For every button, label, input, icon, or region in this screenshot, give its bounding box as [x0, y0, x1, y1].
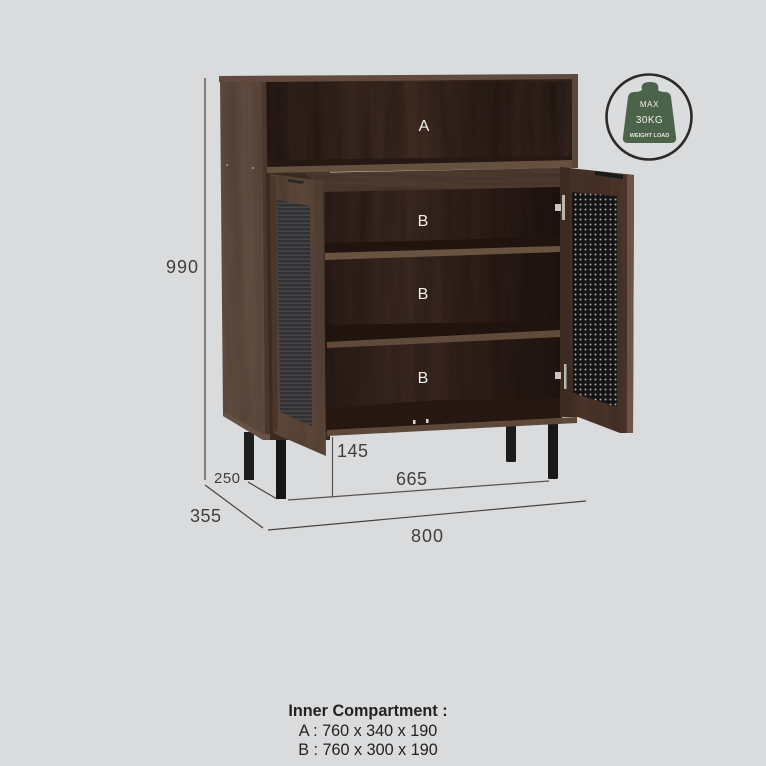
shelf 1: [325, 237, 560, 260]
interior compartments B: [325, 187, 561, 432]
compartment label B top: B: [418, 213, 428, 230]
lower hinge: [555, 364, 566, 389]
note line B: B : 760 x 300 x 190: [298, 741, 438, 759]
dimension 990: 990: [166, 257, 198, 277]
badge text: WEIGHT LOAD: WEIGHT LOAD: [630, 133, 669, 139]
left door: [270, 174, 327, 457]
cabinet floor front edge: [327, 417, 577, 436]
upper hinge: [555, 195, 565, 220]
dimension lines: [205, 78, 586, 530]
dimension 355: 355: [190, 506, 221, 526]
shelf 2: [326, 321, 560, 348]
right door mesh panel: [572, 192, 617, 407]
door header rail: [305, 168, 561, 193]
right door top bracket: [595, 171, 623, 179]
dimension 145: 145: [337, 441, 368, 461]
compartment label A: A: [419, 118, 430, 135]
dimension 665: 665: [396, 469, 427, 489]
left door mesh panel: [277, 200, 312, 426]
dimension 250: 250: [214, 470, 240, 487]
cabinet floor: [327, 398, 562, 430]
back legs: [244, 420, 516, 480]
open upper compartment A: [266, 78, 573, 167]
right door: [560, 167, 635, 434]
left door handle plate: [288, 179, 304, 184]
top slab: [219, 74, 578, 82]
note heading: Inner Compartment :: [288, 702, 448, 720]
weight load badge: [606, 74, 692, 160]
compartment label B bottom: B: [418, 370, 428, 387]
cabinet illustration: [219, 74, 635, 499]
inner compartment note: [288, 702, 448, 759]
front legs: [276, 420, 558, 499]
badge text: MAX: MAX: [640, 100, 659, 109]
left side panel: [220, 82, 272, 442]
recess behind left door: [266, 170, 330, 440]
icon: green weight: [623, 82, 676, 143]
dimension 800: 800: [411, 526, 443, 546]
note line A: A : 760 x 340 x 190: [299, 722, 437, 740]
compartment label B middle: B: [418, 286, 428, 303]
shelf below compartment A: [267, 160, 572, 173]
right upright of upper compartment: [572, 78, 578, 168]
badge text: 30KG: 30KG: [636, 115, 663, 126]
